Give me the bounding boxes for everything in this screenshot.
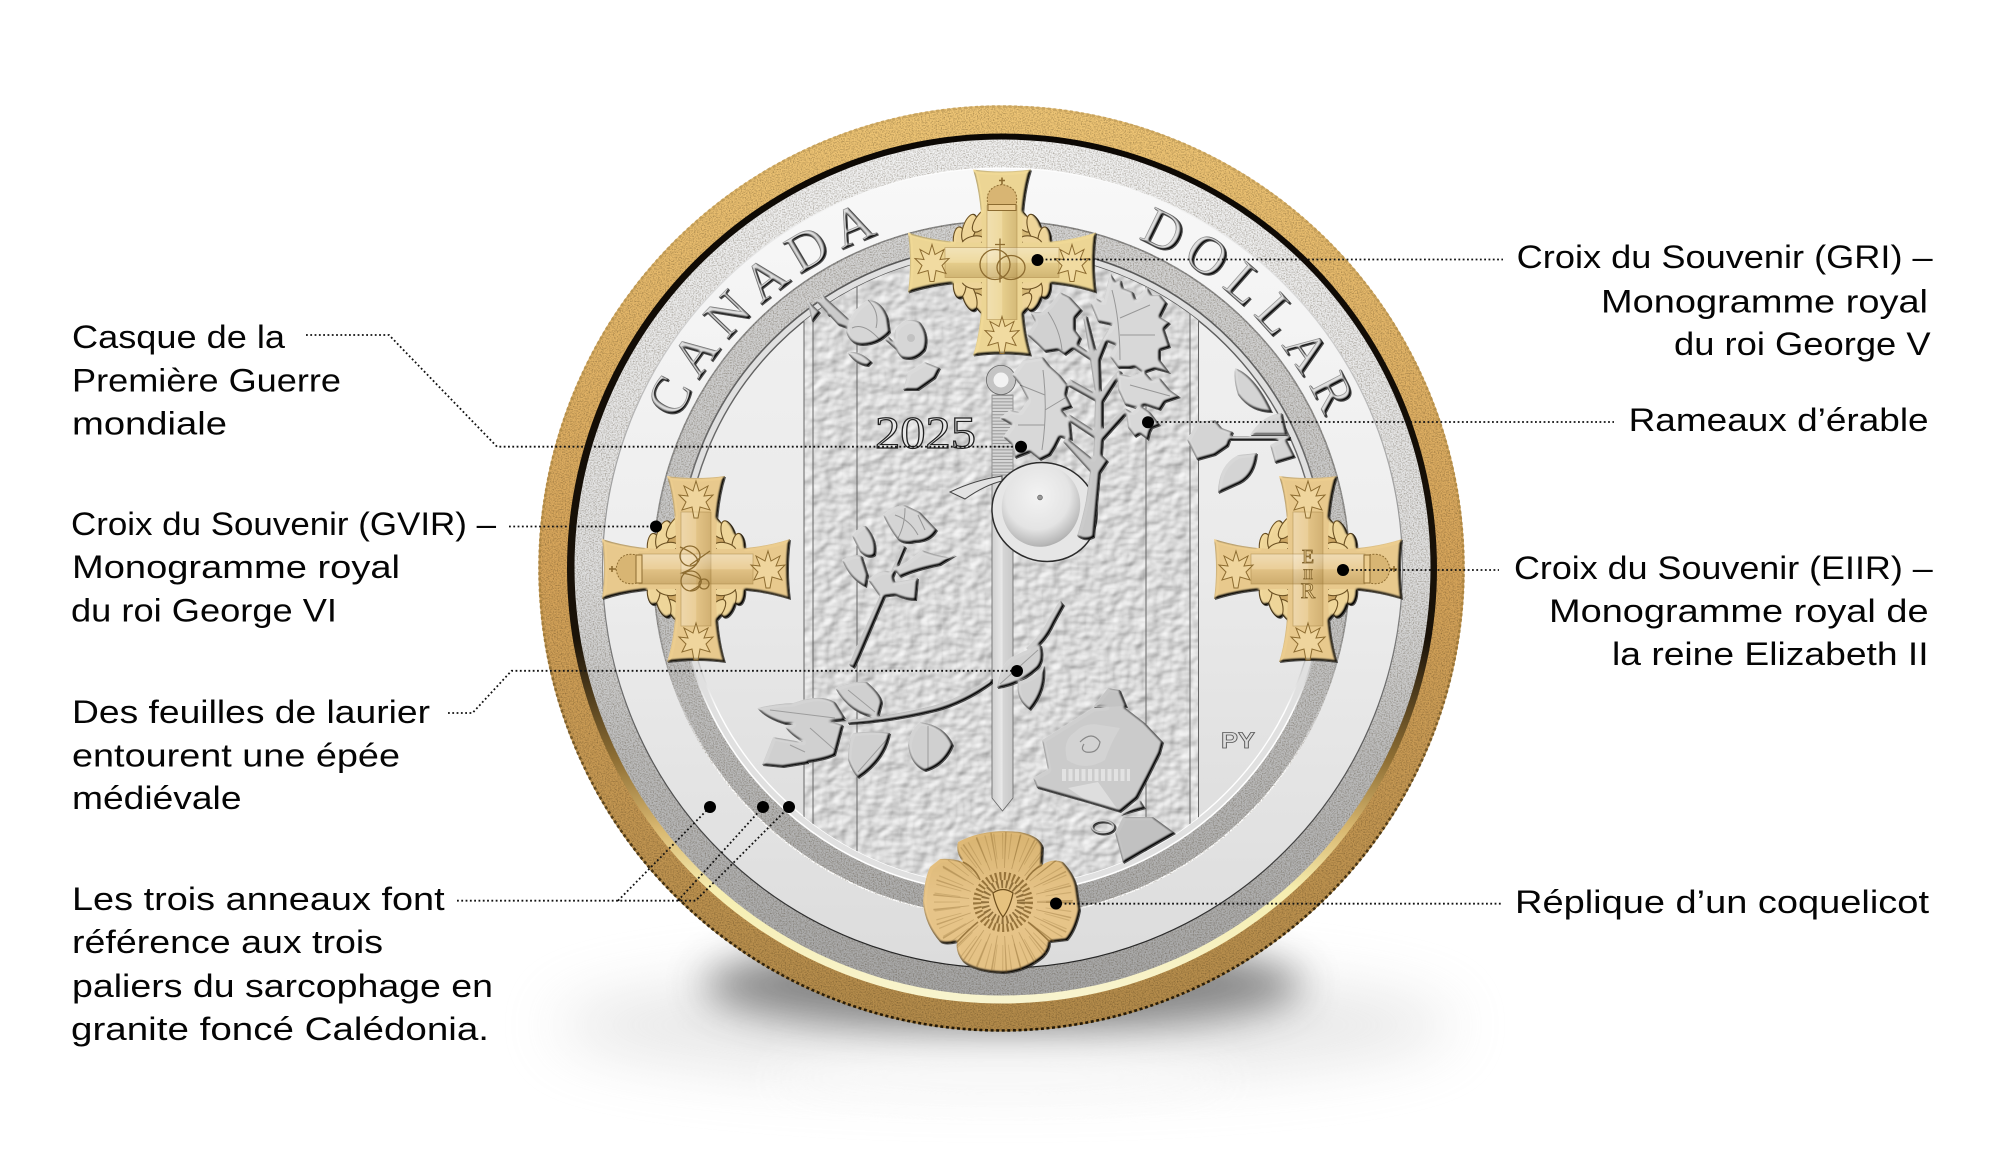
- infographic canvas: [72, 105, 1933, 1085]
- coin shadow: [555, 940, 1455, 1100]
- callout: Croix GVIR: [71, 506, 497, 628]
- inner field: [684, 252, 1318, 886]
- middle ring: [654, 221, 1350, 917]
- callout: Croix GRI: Croix du Souvenir (GRI) –: [1517, 239, 1934, 275]
- leader: Casque: [306, 335, 1027, 453]
- right rose: [1187, 368, 1295, 493]
- leader: Croix GVIR: [509, 520, 662, 532]
- bouquet: [1033, 688, 1175, 863]
- ring inner step: [678, 245, 1326, 893]
- callout: Croix GRI: du roi George V: [1674, 326, 1931, 362]
- outer silver band: [574, 140, 1430, 996]
- callout: Croix EIIR: Monogramme royal de: [1549, 593, 1929, 629]
- rose: [842, 505, 956, 668]
- maple branch: [1000, 273, 1180, 539]
- leader: trois anneaux: [457, 801, 795, 901]
- inscription: DOLLAR: DOLLAR: [1139, 206, 1352, 418]
- callout: Croix EIIR: la reine Elizabeth II: [1612, 636, 1929, 672]
- callout: trois anneaux: granite foncé Calédonia.: [71, 1011, 489, 1047]
- cross: EIIR: E: [1302, 546, 1314, 568]
- callout: Croix GVIR: Croix du Souvenir (GVIR) –: [71, 506, 497, 542]
- mintmark 2025: 2025: [875, 407, 976, 458]
- callout: Croix GVIR: Monogramme royal: [72, 549, 400, 585]
- gold outer rim: [538, 106, 1464, 1032]
- callout: Croix GVIR: du roi George VI: [71, 592, 337, 628]
- leader: feuilles de laurier: [448, 665, 1023, 713]
- callout: trois anneaux: Les trois anneaux font: [72, 881, 445, 917]
- inscription: CANADA: CANADA: [651, 207, 879, 414]
- rim inner bevel: [567, 134, 1437, 1004]
- helmet: [978, 448, 1111, 576]
- poppy: [923, 831, 1080, 973]
- leader: coquelicot: [1050, 898, 1503, 910]
- light field: [602, 168, 1402, 968]
- callout: trois anneaux: référence aux trois: [72, 924, 383, 960]
- callout: feuilles de laurier: entourent une épée: [72, 738, 400, 774]
- callout: trois anneaux: [71, 881, 493, 1047]
- callout: trois anneaux: paliers du sarcophage en: [72, 968, 493, 1004]
- callout: Casque: mondiale: [72, 406, 227, 442]
- callout: Croix GRI: [1517, 239, 1934, 362]
- callout: Croix EIIR: Croix du Souvenir (EIIR) –: [1514, 550, 1934, 586]
- cross: EIIR: II: [1303, 567, 1313, 583]
- reeded edge: [540, 106, 1464, 1030]
- cross: EIIR: [1214, 476, 1402, 662]
- coin: [538, 105, 1465, 1032]
- callout: Croix EIIR: [1514, 550, 1934, 672]
- leader: Croix GRI: [1032, 254, 1503, 266]
- leader: Croix EIIR: [1337, 564, 1499, 576]
- callout: Casque: Casque de la: [72, 319, 286, 355]
- top-left poppies: [807, 292, 940, 390]
- cross: GRI: [908, 170, 1096, 356]
- callout: feuilles de laurier: [72, 694, 430, 816]
- callout: Casque: [72, 319, 341, 442]
- callout: feuilles de laurier: médiévale: [72, 780, 242, 816]
- textured central panel: [804, 240, 1199, 900]
- sword: [950, 365, 1016, 811]
- leader: Rameaux d'érable: [1142, 416, 1614, 428]
- engraver initials PY: PY: [1221, 728, 1255, 753]
- callout: Croix GRI: Monogramme royal: [1601, 284, 1928, 320]
- callout: Rameaux d'érable: Rameaux d’érable: [1629, 402, 1929, 438]
- callout: coquelicot: Réplique d’un coquelicot: [1515, 884, 1929, 920]
- cross: EIIR: R: [1301, 578, 1316, 603]
- laurel branch: [757, 600, 1064, 778]
- callout: feuilles de laurier: Des feuilles de laurier: [72, 694, 430, 730]
- callout: Casque: Première Guerre: [72, 362, 341, 398]
- cross: GVIR: [602, 476, 790, 662]
